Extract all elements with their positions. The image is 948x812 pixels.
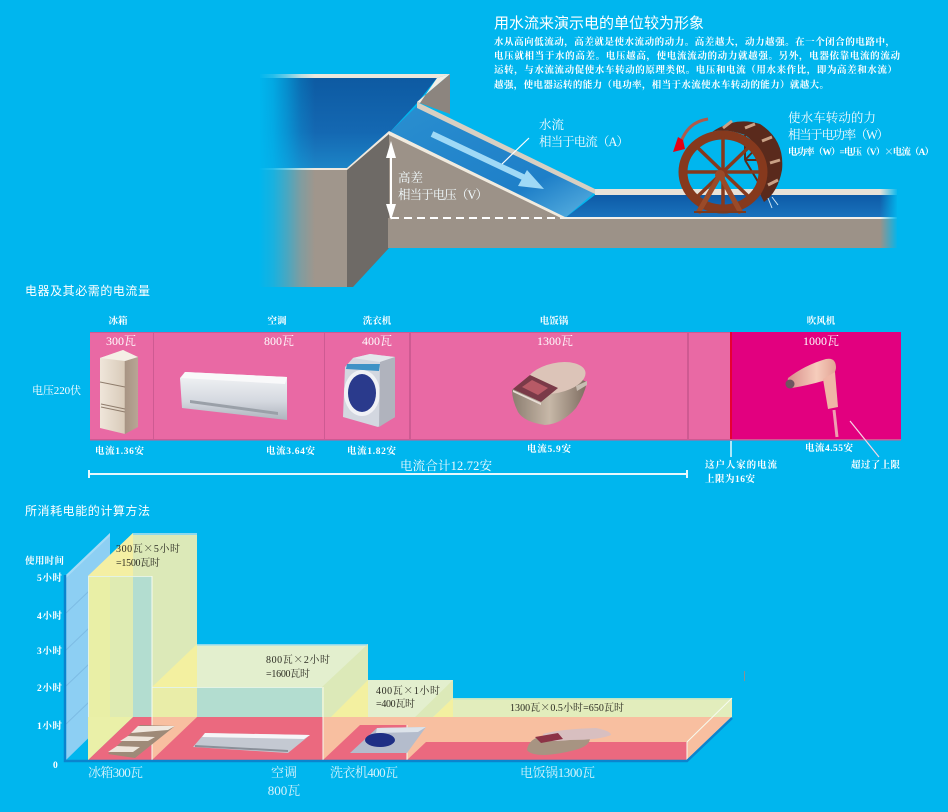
label: height difference xyxy=(398,170,488,202)
lower channel water xyxy=(565,195,897,218)
box 4: rice cooker half hour xyxy=(453,698,732,717)
box 1: fridge 5 hours xyxy=(88,533,197,760)
calculation: air conditioner: 800瓦×2小时 xyxy=(266,651,330,666)
calculation: washing machine xyxy=(376,682,440,710)
limit callout xyxy=(705,441,777,485)
label: height difference: 相当于电压（V） xyxy=(398,187,488,202)
limit callout: 这户人家的电流 xyxy=(705,459,777,471)
bottom labels: 洗衣机400瓦 xyxy=(330,765,398,780)
explanation text: 运转，与水流流动促使水车转动的原理类似。电压和电流（用水来作比，即为高差和水流） xyxy=(494,64,897,76)
diagram: water flow analogy xyxy=(245,14,934,290)
calculation: fridge xyxy=(116,540,180,569)
calculation: washing machine: 400瓦×1小时 xyxy=(376,682,440,697)
wattages: 800瓦 xyxy=(264,334,294,348)
calculation: washing machine: =400瓦时 xyxy=(376,697,415,710)
panel: current bar xyxy=(32,332,901,440)
limit red line xyxy=(730,332,732,440)
currents: 电流1.82安 xyxy=(347,445,396,457)
voltage label: 电压220伏 xyxy=(32,383,81,397)
squashed rice cooker xyxy=(527,728,611,755)
pool rim xyxy=(260,74,450,78)
currents: 电流3.64安 xyxy=(266,445,315,457)
heading: appliances and current: 电器及其必需的电流量 xyxy=(25,283,150,298)
axis labels xyxy=(25,555,64,771)
label: wheel power: 使水车转动的力 xyxy=(788,110,876,125)
right fade xyxy=(880,185,898,251)
label: height difference: 高差 xyxy=(398,170,423,185)
ridge triangle xyxy=(389,132,565,218)
floor xyxy=(88,717,732,760)
appliance names: 电饭锅 xyxy=(540,315,569,327)
rotation arrow xyxy=(673,119,708,152)
explanation text: 水从高向低流动，高差就是使水流动的动力。高差越大，动力越强。在一个闭合的电路中， xyxy=(494,36,895,48)
hair dryer section xyxy=(730,332,901,440)
height arrow xyxy=(386,141,396,220)
label: water flow: 相当于电流（A） xyxy=(539,134,629,149)
axis labels: 2小时 xyxy=(37,682,62,694)
left fade xyxy=(245,60,315,290)
floor shaded panels xyxy=(152,717,732,760)
icon: hair dryer xyxy=(786,359,838,437)
axis labels: 5小时 xyxy=(37,572,62,584)
currents: 电流4.55安 xyxy=(805,442,853,454)
over limit callout: 超过了上限 xyxy=(851,459,900,471)
pool back wall xyxy=(417,74,450,114)
axis labels: 3小时 xyxy=(37,645,62,657)
appliance names: 冰箱 xyxy=(108,315,128,327)
appliance names xyxy=(108,315,836,327)
box 2: air conditioner 2 hours xyxy=(152,644,368,717)
label: water flow xyxy=(539,117,629,149)
label: wheel power: 相当于电功率（W） xyxy=(788,127,889,142)
stray tick xyxy=(744,671,745,681)
squashed air conditioner xyxy=(193,733,310,753)
axis labels: 1小时 xyxy=(37,720,62,732)
chute water xyxy=(389,106,595,218)
water wheel xyxy=(683,121,782,213)
calculation: fridge: 300瓦×5小时 xyxy=(116,540,180,555)
bottom labels: 800瓦 xyxy=(268,783,300,798)
appliance names: 吹风机 xyxy=(807,315,836,327)
box 3: washing machine 1 hour xyxy=(323,680,453,742)
appliance names: 空调 xyxy=(267,315,287,327)
icon: rice cooker xyxy=(512,357,588,425)
block side xyxy=(347,132,389,287)
flow arrow xyxy=(432,134,544,189)
upper pool water xyxy=(250,78,437,168)
leader line xyxy=(502,138,529,164)
over limit callout xyxy=(850,421,900,471)
label: water flow: 水流 xyxy=(539,117,565,132)
bottom labels xyxy=(88,765,595,798)
bottom labels: 电饭锅1300瓦 xyxy=(520,765,595,780)
limit callout: 上限为16安 xyxy=(705,473,755,485)
axis xyxy=(65,575,732,761)
wattages: 1000瓦 xyxy=(803,334,839,348)
label: wheel power: 电功率（W）=电压（V）×电流（A） xyxy=(788,144,934,158)
lower channel upper edge xyxy=(595,189,897,195)
calculation: air conditioner xyxy=(266,651,330,680)
currents xyxy=(95,442,853,457)
squashed washing machine xyxy=(350,727,426,753)
explanation text: 电压就相当于水的高差。电压越高，使电流流动的动力就越强。另外，电器依靠电流的流动 xyxy=(494,50,900,62)
calculation: rice cooker: 1300瓦×0.5小时=650瓦时 xyxy=(510,699,624,714)
label: wheel power xyxy=(788,110,934,158)
box edges xyxy=(152,576,732,760)
wattages: 300瓦 xyxy=(106,334,136,348)
heading: energy calculation: 所消耗电能的计算方法 xyxy=(25,503,150,518)
appliance names: 洗衣机 xyxy=(363,315,392,327)
icon: fridge xyxy=(100,350,138,434)
wattages: 1300瓦 xyxy=(537,334,573,348)
currents: 电流1.36安 xyxy=(95,445,144,457)
dashed height base xyxy=(391,217,560,219)
title: 用水流来演示电的单位较为形象 xyxy=(494,14,704,32)
axis labels: 4小时 xyxy=(37,610,62,622)
channel base xyxy=(388,218,897,248)
currents: 电流5.9安 xyxy=(527,443,571,455)
chute upper edge xyxy=(417,102,595,194)
bottom labels: 空调 xyxy=(271,765,297,780)
chart: energy by appliance xyxy=(65,533,745,761)
explanation text: 越强，使电器运转的能力（电功率，相当于水流使水车转动的能力）就越大。 xyxy=(494,79,829,91)
calculation: fridge: =1500瓦时 xyxy=(116,556,160,569)
block front xyxy=(250,168,347,287)
total current bracket: 电流合计12.72安 xyxy=(400,458,492,473)
wattages xyxy=(106,334,839,348)
back wall xyxy=(66,533,110,760)
icon: washing machine xyxy=(343,354,395,427)
wattages: 400瓦 xyxy=(362,334,392,348)
pink bar xyxy=(90,332,730,440)
axis labels: 使用时间 xyxy=(25,555,64,567)
calculation: air conditioner: =1600瓦时 xyxy=(266,667,310,680)
explanation text xyxy=(494,36,900,91)
bottom labels: 冰箱300瓦 xyxy=(88,765,143,780)
squashed fridge xyxy=(108,725,175,758)
icon: air conditioner xyxy=(180,372,287,420)
axis labels: 0 xyxy=(53,761,58,771)
